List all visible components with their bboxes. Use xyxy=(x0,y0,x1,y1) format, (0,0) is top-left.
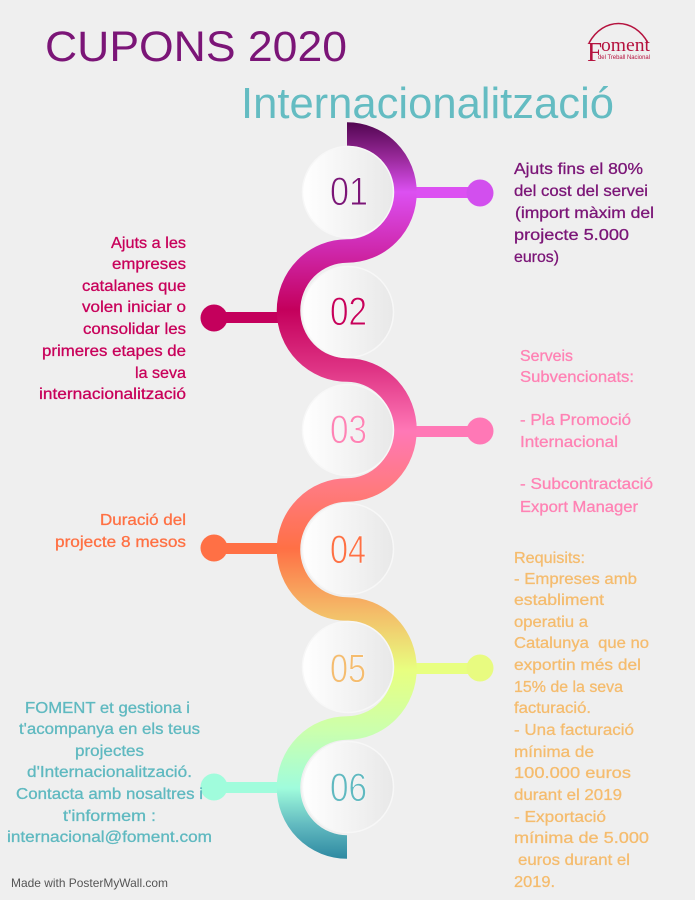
text block: Foment contact: internacional@foment.com xyxy=(7,829,212,846)
text block: project duration xyxy=(55,512,186,551)
step 05 disc and number xyxy=(302,622,394,712)
text block: Foment contact xyxy=(7,700,212,846)
step 03 disc and number xyxy=(302,384,394,476)
connector and dot 06 xyxy=(200,774,282,800)
step 02 disc and number: 02 xyxy=(330,290,367,334)
text block: aid for Catalan companies: consolidar les xyxy=(83,321,186,338)
text block: aid up to 80% xyxy=(514,161,654,266)
step 05 disc and number: 05 xyxy=(330,647,366,691)
text block: aid for Catalan companies: primeres etapes de xyxy=(42,343,186,360)
text block: subsidised services: Subvencionats: xyxy=(520,369,634,386)
title: CUPONS 2020: CUPONS 2020 xyxy=(45,23,347,71)
text block: aid for Catalan companies xyxy=(39,235,186,403)
text block: aid for Catalan companies: catalanes que xyxy=(82,278,186,295)
text block: requirements: - Empreses amb xyxy=(514,571,637,588)
text block: aid for Catalan companies: empreses xyxy=(112,256,186,273)
text block: requirements: 2019. xyxy=(514,874,555,891)
text block: Foment contact: d'Internacionalització. xyxy=(27,764,192,781)
text block: aid up to 80%: (import màxim del xyxy=(515,205,654,222)
winding gradient ribbon xyxy=(289,134,405,847)
text block: requirements: mínima de xyxy=(514,744,594,761)
text block: aid for Catalan companies: volen iniciar o xyxy=(82,299,186,316)
text block: subsidised services: Export Manager xyxy=(520,499,639,516)
text block: requirements: mínima de 5.000 xyxy=(514,830,649,847)
text block: requirements: Catalunya que no xyxy=(514,635,649,652)
text block: requirements: operatiu a xyxy=(514,614,588,631)
logo: Foment del Treball Nacional: oment xyxy=(601,35,651,56)
text block: requirements: - Exportació xyxy=(514,809,606,826)
text block: Foment contact: Contacta amb nosaltres i xyxy=(16,786,203,803)
step 06 disc and number: 06 xyxy=(330,766,367,810)
connector and dot 05 xyxy=(410,654,494,682)
text block: project duration: Duració del xyxy=(100,512,186,529)
text block: requirements: exportin més del xyxy=(514,657,641,674)
text block: Foment contact: t'informem : xyxy=(63,808,156,825)
logo: Foment del Treball Nacional: del Treball Nacional xyxy=(598,55,650,61)
text block: aid up to 80%: euros) xyxy=(514,249,559,266)
text block: aid for Catalan companies: la seva xyxy=(135,365,186,382)
text block: aid up to 80%: projecte 5.000 xyxy=(514,227,629,244)
connector and dot 02 xyxy=(200,304,282,332)
subtitle: Internacionalització: Internacionalització xyxy=(241,79,614,128)
step 06 disc and number xyxy=(302,742,394,832)
text block: requirements: establiment xyxy=(514,592,605,609)
text block: requirements: - Una facturació xyxy=(514,722,634,739)
text block: Foment contact: t'acompanya en els teus xyxy=(19,721,200,738)
connector and dot 01 xyxy=(410,180,494,206)
text block: project duration: projecte 8 mesos xyxy=(55,534,186,551)
step 04 disc and number xyxy=(302,504,394,594)
text block: requirements: durant el 2019 xyxy=(514,787,622,804)
text block: requirements: facturació. xyxy=(514,700,591,717)
footer credit: Made with PosterMyWall.com xyxy=(11,876,168,890)
text block: requirements: euros durant el xyxy=(518,852,630,869)
text block: requirements: Requisits: xyxy=(514,550,585,567)
text block: requirements: 15% de la seva xyxy=(514,679,623,696)
connector and dot 03 xyxy=(410,418,494,444)
logo: Foment del Treball Nacional xyxy=(587,24,651,67)
step 02 disc and number xyxy=(302,266,394,358)
step 04 disc and number: 04 xyxy=(330,528,366,572)
connector and dot 04 xyxy=(200,534,282,562)
step 01 disc and number: 01 xyxy=(330,170,368,214)
text block: subsidised services: - Subcontractació xyxy=(520,476,653,493)
text block: subsidised services xyxy=(520,348,653,516)
logo: Foment del Treball Nacional: F xyxy=(587,37,602,67)
text block: Foment contact: FOMENT et gestiona i xyxy=(25,700,190,717)
text block: subsidised services: Serveis xyxy=(520,348,573,365)
step 03 disc and number: 03 xyxy=(330,408,367,452)
text block: subsidised services: - Pla Promoció xyxy=(520,412,631,429)
text block: aid up to 80%: del cost del servei xyxy=(514,183,648,200)
text block: subsidised services: Internacional xyxy=(520,434,618,451)
text block: aid for Catalan companies: Ajuts a les xyxy=(111,235,186,252)
step 01 disc and number xyxy=(302,146,394,238)
text block: Foment contact: projectes xyxy=(75,743,144,760)
text block: requirements: 100.000 euros xyxy=(514,765,631,782)
text block: requirements xyxy=(514,550,649,891)
text block: aid up to 80%: Ajuts fins el 80% xyxy=(514,161,643,178)
text block: aid for Catalan companies: internacionalització xyxy=(39,386,186,403)
